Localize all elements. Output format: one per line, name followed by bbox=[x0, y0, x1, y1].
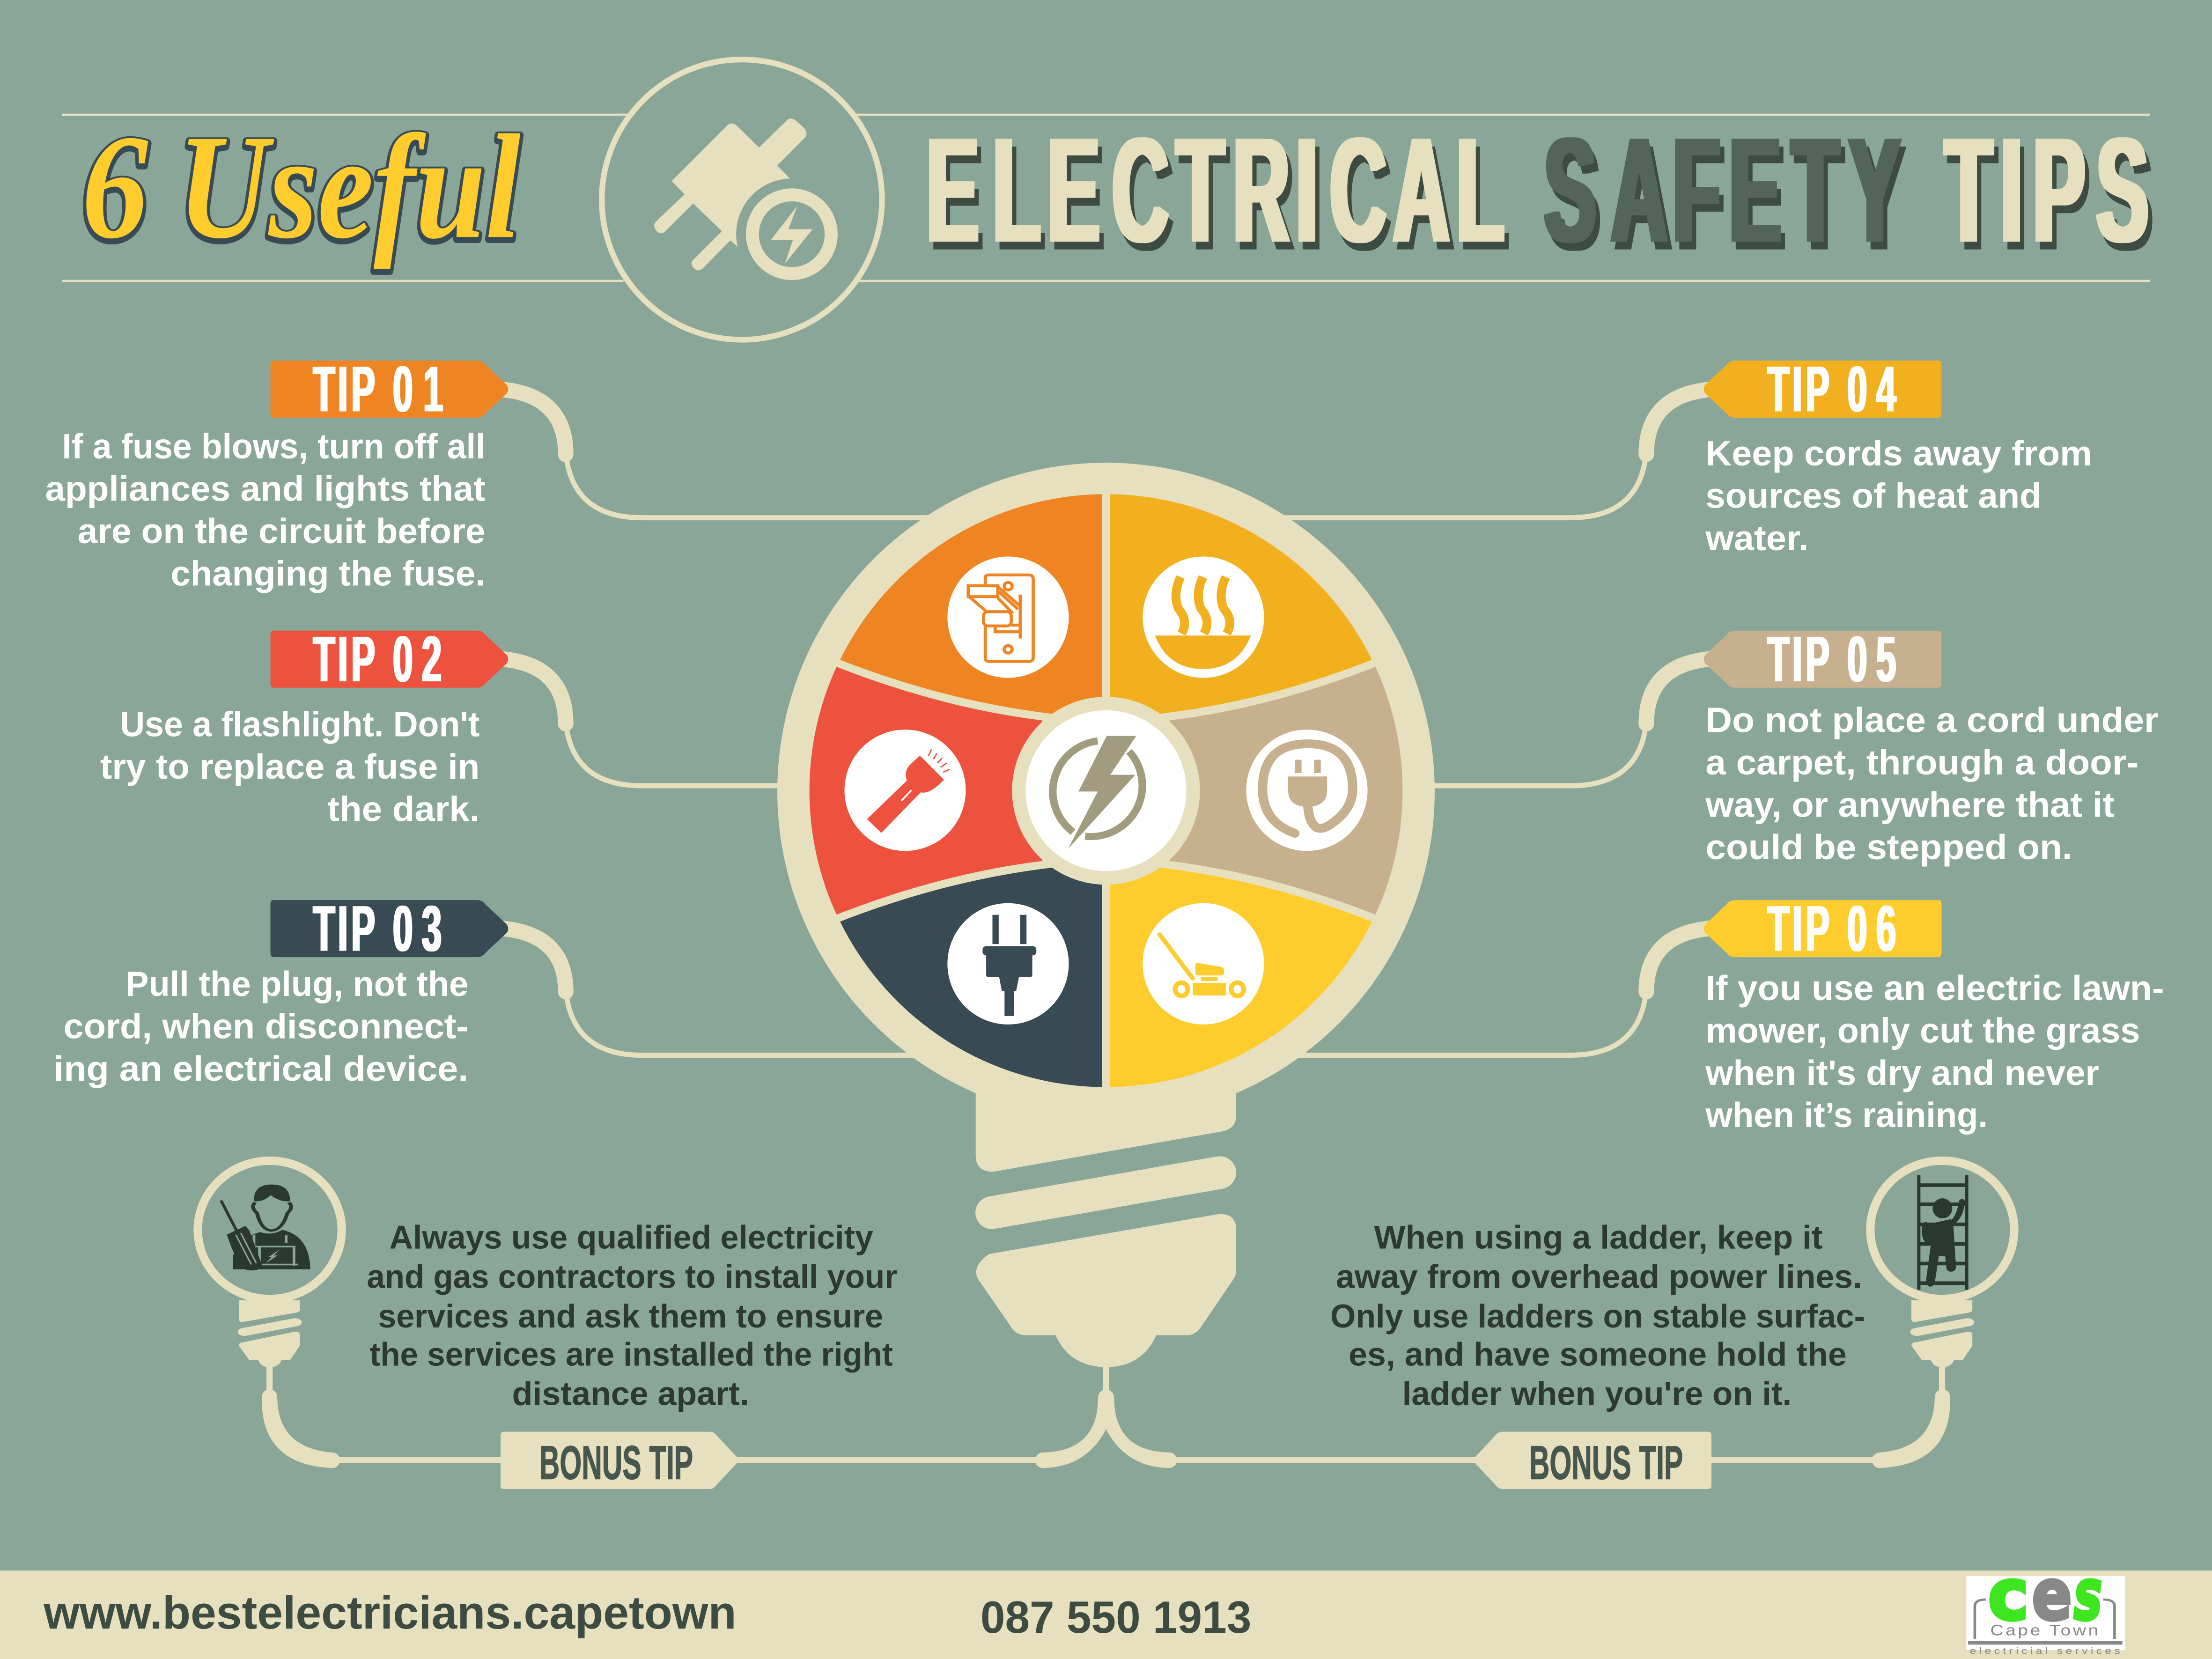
tag: tip 03: TIP 03 bbox=[313, 892, 442, 965]
text: tip 03: ing an electrical device. bbox=[53, 1049, 468, 1088]
segment: yellow bbox=[1110, 868, 1372, 1087]
text: tip 03: cord, when disconnect- bbox=[64, 1006, 468, 1046]
tag: tip 06: TIP 06 bbox=[1768, 892, 1896, 965]
bulb screw base bbox=[976, 1080, 1236, 1468]
panel: tip 03 bbox=[53, 892, 508, 1088]
icon: wall plug bbox=[982, 915, 1036, 1016]
icon: hand on switch bbox=[968, 575, 1033, 662]
icon: plug with cord bbox=[1262, 744, 1353, 833]
heading: 6 Useful: Useful bbox=[178, 104, 521, 270]
icon: person on ladder bbox=[1917, 1175, 1969, 1290]
panel: tip 01 bbox=[45, 353, 508, 593]
heading shadow: SAFETY bbox=[1548, 114, 1905, 281]
bonus tip: ladder bbox=[1168, 1161, 2014, 1489]
text: tip 04: Keep cords away from bbox=[1705, 434, 2092, 473]
heading: Electrical Safety Tips bbox=[927, 107, 2153, 281]
text: tip 06: mower, only cut the grass bbox=[1705, 1010, 2140, 1050]
text: bonus tip left bbox=[367, 1219, 897, 1413]
text: bonus tip right: When using a ladder, keep it bbox=[1374, 1219, 1822, 1256]
text: tip 06: If you use an electric lawn- bbox=[1705, 968, 2164, 1008]
tag: tip 01 bbox=[271, 353, 508, 425]
panel: tip 05 bbox=[1704, 623, 2159, 867]
text: tip 04: sources of heat and bbox=[1705, 476, 2041, 516]
text: bonus tip left: and gas contractors to install your bbox=[367, 1259, 897, 1296]
connector wires from tips to bulb bbox=[501, 390, 1711, 1055]
logo: CES Cape Town bbox=[1966, 1554, 2125, 1656]
heading shadow bbox=[931, 114, 2153, 281]
text: bonus tip left: the services are installed the right bbox=[369, 1336, 893, 1373]
text: bonus tip right: es, and have someone hold the bbox=[1349, 1336, 1847, 1373]
text: bonus tip left: distance apart. bbox=[512, 1376, 749, 1413]
heading face bbox=[927, 107, 2148, 273]
tag: tip 02 bbox=[271, 623, 508, 695]
website: www.bestelectricians.capetown bbox=[43, 1587, 737, 1639]
text: tip 05: Do not place a cord under bbox=[1705, 700, 2159, 740]
text: bonus tip left: Always use qualified electricity bbox=[390, 1219, 873, 1256]
text: tip 01: appliances and lights that bbox=[45, 469, 485, 509]
icon: lawn mower bbox=[1159, 935, 1244, 996]
tag: tip 02: TIP 02 bbox=[313, 623, 442, 695]
phone number: 087 550 1913 bbox=[981, 1593, 1251, 1643]
hub bbox=[1012, 697, 1200, 885]
panel: tip 06 bbox=[1704, 892, 2164, 1135]
icon: steam over bowl bbox=[1155, 577, 1251, 669]
text: tip 06: when it's dry and never bbox=[1705, 1053, 2099, 1092]
small bulb right bbox=[1870, 1161, 2014, 1468]
tag: tip 04 bbox=[1704, 353, 1941, 425]
text: tip 01: If a fuse blows, turn off all bbox=[62, 427, 485, 466]
text: tip 06: when it’s raining. bbox=[1705, 1095, 1988, 1135]
small bulb left bbox=[198, 1161, 342, 1468]
icon discs bbox=[844, 557, 1368, 1025]
heading face: ELECTRICAL bbox=[927, 107, 1504, 273]
main light bulb bbox=[777, 463, 1435, 1468]
icon: electrician bbox=[221, 1185, 310, 1270]
heading: 6 Useful: 6 bbox=[82, 104, 148, 270]
tag: bonus tip left bbox=[501, 1432, 738, 1489]
icon: flashlight bbox=[867, 749, 950, 833]
header band bbox=[62, 59, 2153, 339]
icon: lightning bolt in ring bbox=[1053, 736, 1143, 849]
text: tip 02 bbox=[100, 705, 479, 828]
panel: tip 02 bbox=[100, 623, 508, 828]
tag: tip 05: TIP 05 bbox=[1768, 623, 1896, 695]
tag: tip 04: TIP 04 bbox=[1768, 353, 1896, 425]
text: tip 01: are on the circuit before bbox=[78, 511, 485, 551]
panel: tip 04 bbox=[1704, 353, 2092, 558]
text: tip 01 bbox=[45, 427, 485, 593]
footer band bbox=[0, 1554, 2212, 1659]
segment: navy bbox=[840, 868, 1102, 1087]
tag: tip 05 bbox=[1704, 623, 1941, 695]
wire and tag bbox=[339, 1432, 1044, 1489]
bonus tip: contractors bbox=[198, 1161, 1044, 1489]
text: tip 05: way, or anywhere that it bbox=[1705, 785, 2115, 824]
text: tip 05: could be stepped on. bbox=[1705, 827, 2072, 867]
heading shadow: ELECTRICAL bbox=[931, 114, 1508, 281]
heading: 6 Useful bbox=[82, 104, 521, 272]
text: tip 04: water. bbox=[1705, 518, 1808, 558]
text: tip 02: try to replace a fuse in bbox=[100, 747, 479, 786]
text: bonus tip right: away from overhead power lines. bbox=[1336, 1259, 1862, 1296]
heading face: SAFETY bbox=[1544, 107, 1901, 273]
text: tip 02: the dark. bbox=[327, 789, 479, 828]
tag: tip 03 bbox=[271, 892, 508, 965]
logo: CES Cape Town: s bbox=[2074, 1554, 2102, 1636]
heading face: TIPS bbox=[1945, 107, 2148, 273]
text: tip 02: Use a flashlight. Don't bbox=[120, 705, 479, 744]
logo: CES Cape Town: e bbox=[2032, 1554, 2072, 1636]
tag: bonus tip right: BONUS TIP bbox=[1529, 1437, 1683, 1489]
segment: orange bbox=[840, 494, 1102, 714]
text: tip 03 bbox=[53, 964, 468, 1088]
heading: 6 Useful: 6 bbox=[82, 106, 148, 272]
tag: bonus tip left: BONUS TIP bbox=[539, 1437, 693, 1489]
text: bonus tip right bbox=[1330, 1219, 1865, 1413]
logo: CES Cape Town: c bbox=[1988, 1554, 2028, 1636]
text: tip 05 bbox=[1705, 700, 2159, 867]
segment: amber bbox=[1110, 494, 1372, 714]
segment: red bbox=[810, 667, 1042, 914]
icon: plug in circle bbox=[602, 59, 882, 339]
logo: CES Cape Town: Cape Town bbox=[1990, 1622, 2098, 1639]
tag: tip 06 bbox=[1704, 892, 1941, 965]
segment: tan bbox=[1170, 667, 1402, 914]
text: tip 01: changing the fuse. bbox=[171, 553, 485, 593]
tag: tip 01: TIP 01 bbox=[313, 353, 443, 425]
text: tip 03: Pull the plug, not the bbox=[125, 964, 468, 1003]
text: bonus tip right: Only use ladders on stable surfac- bbox=[1330, 1298, 1865, 1335]
tag: bonus tip right bbox=[1474, 1432, 1711, 1489]
logo: CES Cape Town: electricial services bbox=[1970, 1645, 2120, 1656]
text: tip 06 bbox=[1705, 968, 2164, 1135]
text: bonus tip left: services and ask them to ensure bbox=[378, 1298, 883, 1335]
text: tip 05: a carpet, through a door- bbox=[1705, 743, 2138, 782]
heading shadow: TIPS bbox=[1949, 114, 2153, 281]
heading: 6 Useful: Useful bbox=[178, 106, 521, 272]
text: bonus tip right: ladder when you're on it. bbox=[1402, 1376, 1792, 1413]
text: tip 04 bbox=[1705, 434, 2092, 558]
wire and tag bbox=[1168, 1432, 1873, 1489]
